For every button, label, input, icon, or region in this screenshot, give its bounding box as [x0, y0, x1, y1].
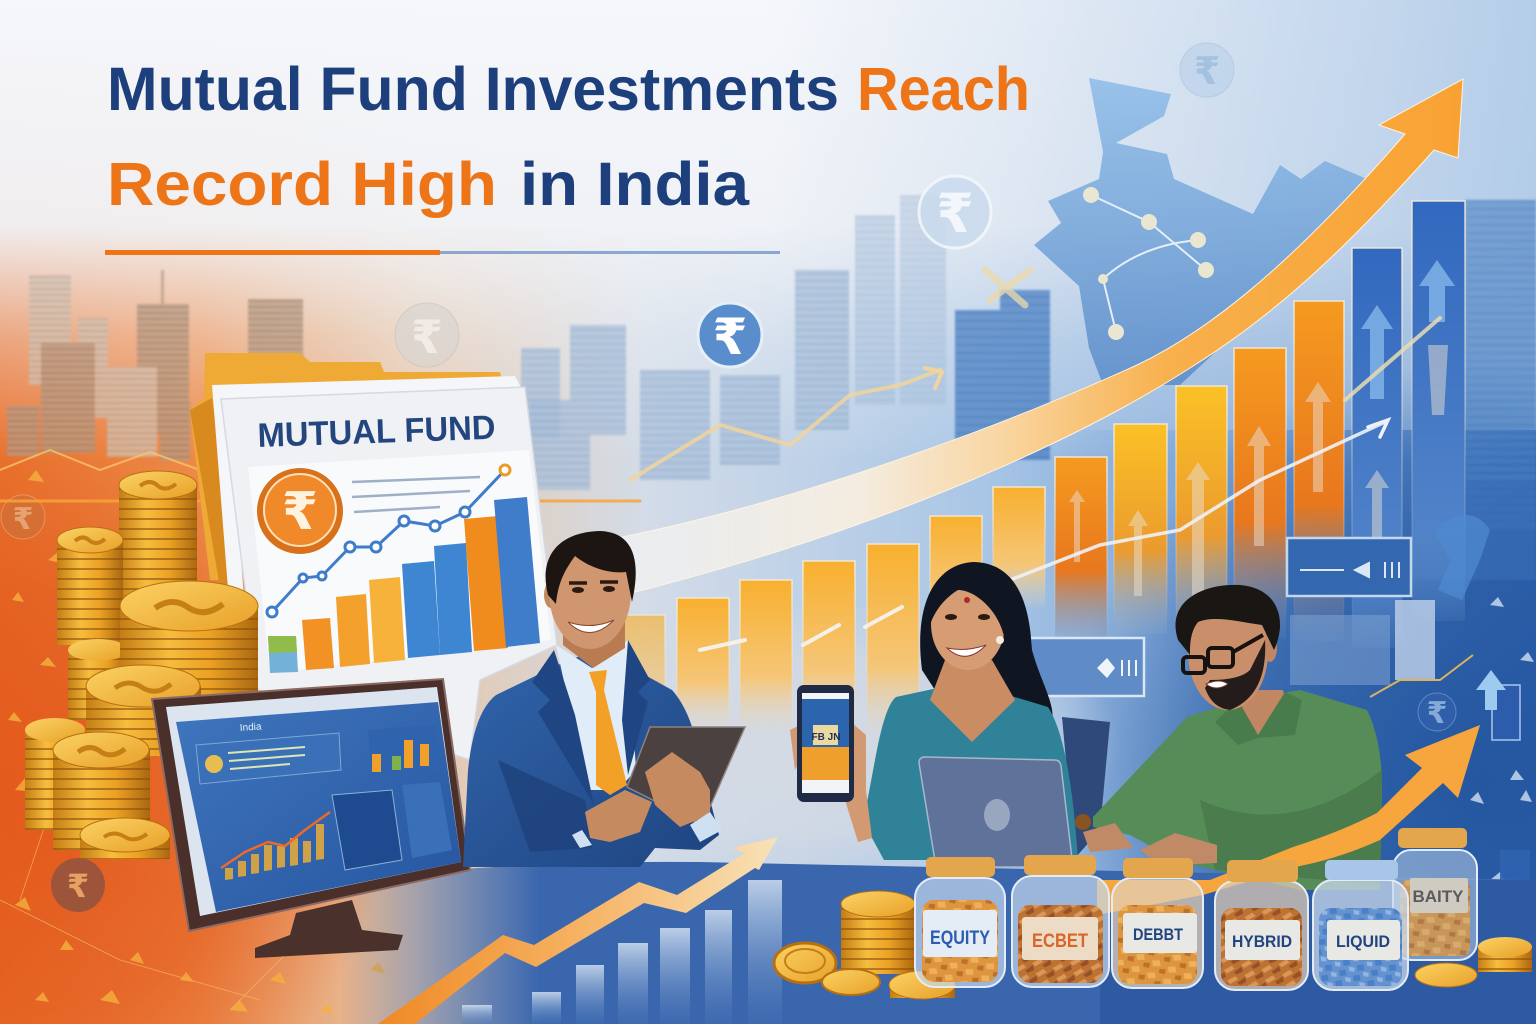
- title: Mutual Fund Investments: [107, 55, 839, 123]
- up arrow: [1476, 670, 1506, 710]
- background fragments: right side city: [1030, 515, 1536, 1012]
- skyline: left orange city: [7, 270, 560, 461]
- chair: [1062, 717, 1110, 858]
- phone: [797, 685, 854, 802]
- neck: [1235, 690, 1288, 738]
- jar: debt: [1112, 858, 1203, 988]
- bar chart: rising bars: [615, 201, 1465, 734]
- report line chart: [272, 470, 505, 612]
- cuffs: [572, 812, 722, 848]
- computer monitor: [152, 679, 470, 958]
- businessman with tablet: [463, 531, 745, 867]
- dashboard chart: [225, 824, 324, 880]
- laptop: [919, 757, 1073, 867]
- report sheet: [221, 387, 557, 760]
- face: [568, 582, 618, 633]
- head: [931, 578, 1005, 670]
- hair back: [920, 562, 1053, 722]
- tablet: [627, 727, 745, 825]
- face: [945, 597, 1004, 656]
- suit: [463, 652, 719, 867]
- jar: liquid: [1313, 860, 1408, 990]
- neck and head: [563, 610, 625, 668]
- map of India: [1034, 78, 1367, 385]
- thin trend lines: [0, 270, 1440, 650]
- text lines: [352, 477, 480, 512]
- fringe: [930, 570, 1008, 636]
- rupee badges: ₹: [67, 868, 89, 904]
- title: in India: [520, 150, 750, 218]
- dashboard panels: [196, 733, 341, 784]
- head: [1188, 594, 1268, 710]
- data panel left: [1030, 638, 1144, 696]
- table surface: [340, 862, 1536, 1024]
- jar: liquid: LIQUID: [1336, 932, 1390, 951]
- man with glasses: [1075, 585, 1382, 890]
- data panel: [1287, 538, 1411, 596]
- screen bezel: [166, 687, 461, 916]
- jar: ecbet: ECBET: [1032, 931, 1088, 952]
- sweater: [1093, 690, 1382, 890]
- bottom arrow: [378, 837, 778, 1024]
- neck: [930, 660, 1015, 742]
- coin stacks: [25, 471, 258, 859]
- big rising arrow: [622, 79, 1463, 592]
- small chart at bottom: [462, 880, 782, 1024]
- folder tabs: [190, 353, 505, 580]
- rupee badges: ₹: [1194, 51, 1220, 93]
- hands: [585, 752, 710, 842]
- jar: equity: EQUITY: [930, 928, 990, 949]
- mouth: [1206, 681, 1228, 688]
- beard: [1205, 640, 1265, 710]
- jar: ecbet: [1012, 855, 1109, 987]
- ladder block: [1492, 685, 1520, 740]
- rupee badges: ₹: [936, 184, 974, 244]
- phone: FB JN: [812, 732, 840, 743]
- glasses: [1183, 635, 1263, 673]
- woman with phone: [790, 562, 1110, 867]
- fragments: [1060, 597, 1534, 1012]
- dashboard panel behind man: [1290, 615, 1390, 685]
- shirt: [556, 640, 636, 790]
- cylinder: [1395, 600, 1435, 680]
- rupee badges: ₹: [411, 311, 443, 363]
- tie: [589, 670, 627, 795]
- stand: [255, 900, 403, 958]
- background fragments: orange network: [0, 470, 386, 1014]
- hair: [546, 531, 636, 604]
- rupee badges: ₹: [713, 309, 747, 365]
- jar: debt: DEBBT: [1133, 925, 1184, 944]
- rupee coin: [257, 468, 343, 554]
- watch: [1075, 814, 1091, 830]
- title: [107, 55, 1030, 218]
- screen: [176, 702, 461, 912]
- skyline: center and right blue city: [530, 195, 1536, 580]
- hands: [1083, 823, 1217, 866]
- sweater shade: [1200, 770, 1382, 885]
- lapels: [532, 640, 650, 805]
- light shape: [1434, 515, 1490, 600]
- forearm and hand: [790, 723, 872, 842]
- report bars: [268, 497, 540, 673]
- rupee badges: ₹: [13, 503, 33, 536]
- jar: hybrid: HYBRID: [1232, 932, 1292, 951]
- jar: baity: BAITY: [1412, 887, 1464, 906]
- rupee badges: ₹: [1427, 697, 1447, 730]
- title: Record High: [107, 150, 497, 218]
- loose coins: [774, 891, 1532, 999]
- right arrow: [1097, 725, 1480, 915]
- collar: [1215, 692, 1302, 745]
- folder and report: [190, 353, 557, 760]
- report heading: MUTUAL FUND: [257, 409, 496, 455]
- dashboard header: India: [239, 721, 262, 734]
- rupee coin: ₹: [282, 483, 318, 541]
- hair: [1175, 585, 1280, 655]
- top: [860, 682, 1078, 860]
- arm shadow: [498, 760, 592, 852]
- title: Reach: [857, 55, 1030, 123]
- jar: equity: [915, 857, 1005, 987]
- jar: hybrid: [1215, 860, 1308, 990]
- frame: [152, 679, 470, 931]
- gold trend: [1370, 655, 1473, 697]
- jar: baity: [1393, 828, 1477, 960]
- white back sheet: [212, 376, 525, 680]
- title underline: [105, 250, 780, 255]
